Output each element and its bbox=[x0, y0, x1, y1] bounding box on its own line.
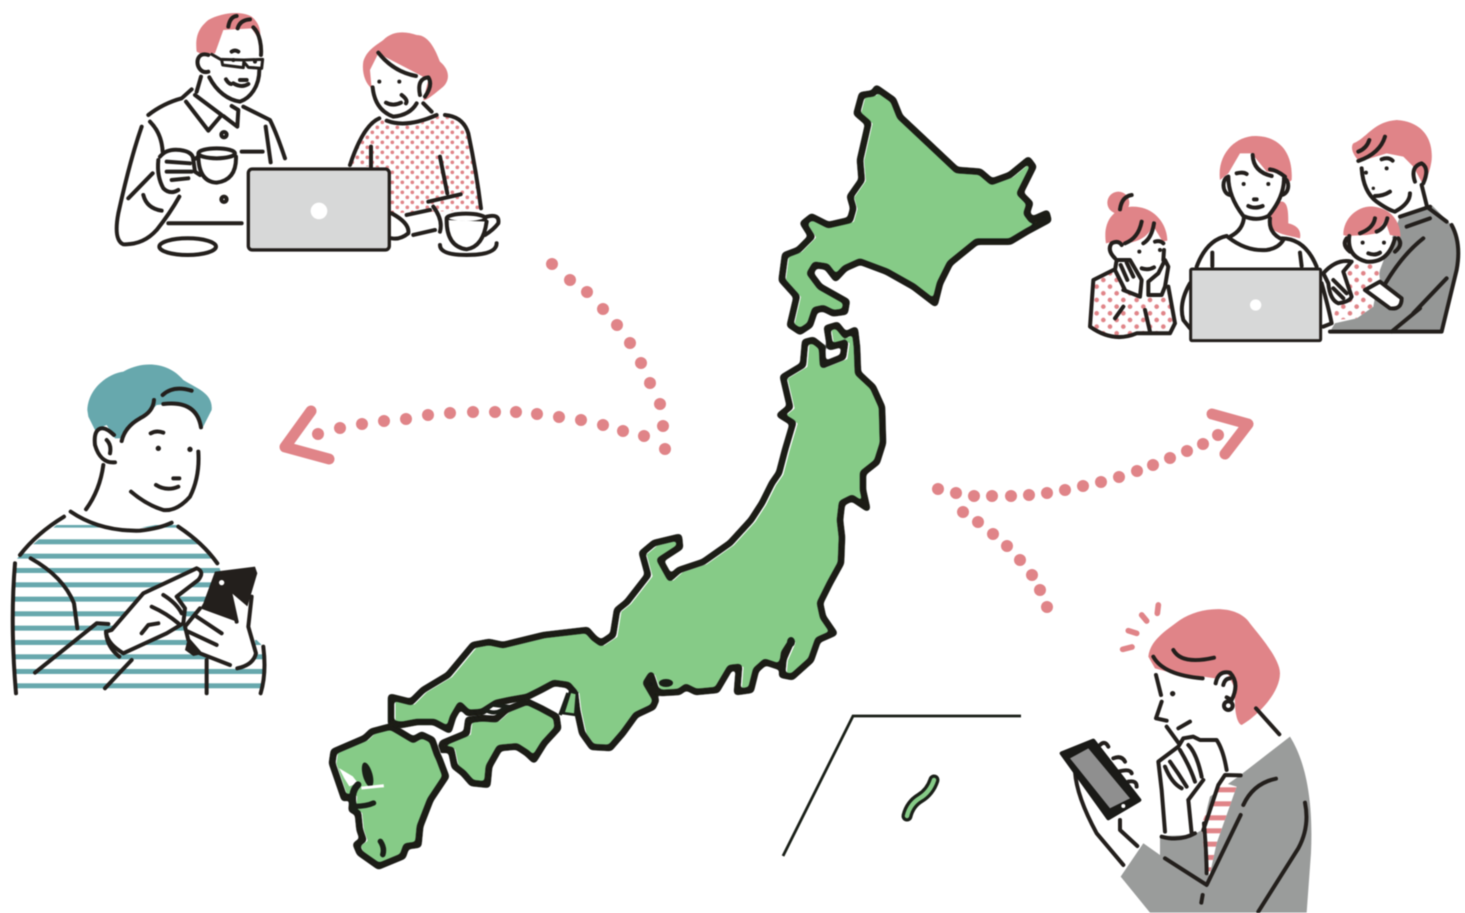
dotted arrow: top-left couple to map bbox=[546, 258, 671, 455]
dotted arrow: woman to map bbox=[957, 506, 1053, 613]
illustration: family with laptop bbox=[1090, 120, 1459, 341]
older man bbox=[117, 13, 285, 255]
hair bbox=[1148, 609, 1280, 725]
striped shirt bbox=[13, 525, 267, 688]
older woman bbox=[350, 32, 498, 255]
smartphone bbox=[1062, 741, 1139, 865]
island: Okinawa bbox=[907, 780, 934, 816]
pointing hand bbox=[106, 568, 201, 653]
laptop bbox=[1191, 269, 1321, 341]
face and body lines bbox=[13, 389, 264, 693]
mother bbox=[1182, 136, 1332, 328]
illustration: older couple with laptop bbox=[117, 13, 498, 255]
father and baby bbox=[1323, 120, 1459, 332]
smartphone bbox=[185, 567, 257, 656]
jacket bbox=[1121, 737, 1311, 913]
dotted arrow: map to family on right bbox=[932, 414, 1248, 502]
illustration: man with striped shirt using phone bbox=[13, 364, 267, 693]
island: Hokkaido bbox=[782, 88, 1051, 332]
face and hand lines bbox=[1153, 650, 1306, 912]
laptop bbox=[248, 169, 389, 250]
phone hand bbox=[185, 592, 257, 668]
surprise marks bbox=[1123, 605, 1158, 649]
island: Honshu bbox=[391, 325, 886, 749]
illustration: woman looking at phone bbox=[1062, 605, 1311, 913]
island: Kyushu bbox=[332, 726, 449, 867]
inset frame: Okinawa bbox=[783, 716, 1021, 856]
map of Japan bbox=[332, 88, 1051, 867]
dotted arrow: map to man on left bbox=[285, 406, 650, 459]
girl bbox=[1090, 192, 1175, 337]
island: Shikoku bbox=[441, 691, 577, 785]
hair bbox=[87, 364, 212, 438]
striped top bbox=[1202, 784, 1237, 876]
